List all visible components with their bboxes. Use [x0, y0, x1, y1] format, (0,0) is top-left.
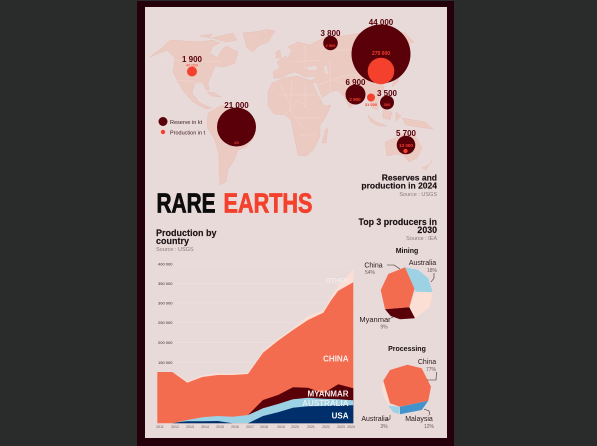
bubble: Australia: 5 700: [396, 129, 417, 138]
bubble: Russia: 2 500: [325, 43, 336, 48]
North America: [150, 40, 238, 109]
x axis labels: 2017: [246, 425, 254, 429]
series labels: [302, 278, 349, 420]
x axis labels: 2015: [216, 425, 224, 429]
x axis labels: 2013: [186, 425, 194, 429]
series labels: AUSTRALIA: [302, 399, 349, 408]
map heading: production in 2024: [361, 180, 437, 190]
chart heading: Source : USGS: [156, 247, 194, 253]
pie: processing: 77%: [426, 367, 437, 373]
top 3 heading: 2030: [417, 225, 437, 235]
bubble: USA: 1 900: [182, 55, 203, 64]
x axis labels: [156, 425, 355, 429]
pie: mining: China: [364, 262, 383, 270]
bubble: USA: [182, 55, 203, 76]
title: RARE: [156, 188, 216, 218]
pie: processing: Australia: [361, 416, 389, 423]
x axis labels: 2020: [291, 425, 299, 429]
bubble: India: 6 900: [345, 78, 366, 87]
bubble: Brazil: [217, 101, 256, 146]
map legend: [158, 117, 206, 136]
bubble: Vietnam: 300: [384, 102, 391, 107]
New Zealand: [422, 160, 432, 170]
Caribbean: [207, 92, 221, 97]
y axis labels: 400 000: [158, 262, 173, 266]
bubble: Myanmar: 31 000: [365, 102, 378, 107]
top 3 heading: Top 3 producers in: [358, 217, 437, 227]
Japan and Philippines: [384, 70, 400, 104]
map heading: Source : USGS: [399, 192, 437, 198]
pie: processing: 3%: [380, 424, 388, 430]
Europe and Asia: [273, 30, 414, 110]
x axis labels: 2012: [171, 425, 179, 429]
bubble: Vietnam: 3 500: [377, 89, 398, 98]
world map: [150, 29, 433, 185]
x axis labels: 2016: [231, 425, 239, 429]
area: Myanmar: [248, 384, 353, 423]
y axis labels: [158, 262, 173, 365]
bubble: China: [352, 18, 410, 84]
bubble: China: 270 000: [372, 51, 390, 57]
top 3 heading: [358, 217, 437, 242]
y axis labels: 350 000: [158, 281, 173, 286]
pie: mining: 18%: [427, 268, 438, 274]
title: EARTHS: [224, 188, 312, 218]
area: USA: [172, 405, 353, 423]
series labels: OTHER: [326, 278, 349, 284]
Africa: [268, 76, 331, 156]
pie: mining: Australia: [409, 260, 436, 267]
pie: processing: [361, 346, 437, 430]
bubble: India: 2 900: [349, 97, 361, 102]
pie: mining: 9%: [380, 324, 388, 330]
area chart: [156, 262, 355, 429]
bubble: Vietnam: [377, 89, 398, 110]
pie: mining: Mining: [396, 248, 418, 255]
y axis labels: 250 000: [158, 320, 173, 325]
area: Australia: [172, 398, 353, 423]
map heading: [361, 172, 437, 198]
x axis labels: 2011: [156, 425, 164, 429]
chart heading: country: [156, 236, 189, 246]
pie: processing: 12%: [424, 424, 435, 430]
series labels: MYANMAR: [307, 390, 349, 398]
area: other: [157, 269, 353, 423]
top 3 heading: Source : IEA: [406, 236, 437, 242]
bubble: Brazil: 21 000: [224, 101, 249, 110]
chart heading: Production by: [156, 228, 216, 238]
map legend: Reserve in kt: [170, 120, 203, 126]
Madagascar: [322, 128, 328, 143]
poster panel: [145, 7, 447, 438]
bubble: Australia: 13 000: [399, 143, 413, 148]
x axis labels: 2018: [260, 425, 268, 429]
x axis labels: 2024: [347, 425, 355, 429]
x axis labels: 2021: [307, 425, 315, 429]
pie: processing: Processing: [388, 346, 426, 353]
map legend: Production in t: [170, 130, 206, 136]
x axis labels: 2014: [201, 425, 209, 429]
series labels: USA: [332, 412, 349, 420]
bubble: Brazil: 20: [234, 140, 239, 145]
series labels: CHINA: [323, 354, 349, 364]
Indonesia: [368, 110, 433, 129]
bubble: China: 44 000: [369, 18, 394, 27]
bubble: USA: 45 000: [186, 62, 199, 68]
pie: mining: Myanmar: [359, 315, 391, 324]
UK and Iceland: [260, 29, 281, 58]
pie: processing: China: [418, 359, 436, 366]
bubble: Russia: 3 800: [320, 29, 341, 38]
chart heading: [156, 228, 216, 253]
x axis labels: 2023: [337, 425, 345, 429]
y axis labels: 200 000: [158, 340, 173, 345]
bubble: Australia: [396, 129, 417, 154]
South America: [207, 105, 256, 185]
y axis labels: 300 000: [158, 300, 173, 306]
bubble: India: [345, 78, 366, 104]
x axis labels: 2019: [277, 425, 285, 429]
pie: processing: Malaysia: [405, 416, 433, 423]
y axis labels: 150 000: [158, 360, 173, 365]
map heading: Reserves and: [382, 172, 437, 182]
area: China: [157, 282, 353, 423]
x axis labels: 2022: [322, 425, 330, 429]
Arctic islands: [200, 33, 237, 42]
seas and country borders: [307, 66, 328, 98]
title: [156, 188, 312, 218]
pie: mining: [359, 248, 438, 330]
bubble: Myanmar: [365, 94, 378, 107]
bubble: Russia: [320, 29, 341, 50]
pie: mining: 54%: [365, 270, 376, 276]
Greenland: [243, 30, 275, 52]
Australia: [385, 133, 422, 162]
